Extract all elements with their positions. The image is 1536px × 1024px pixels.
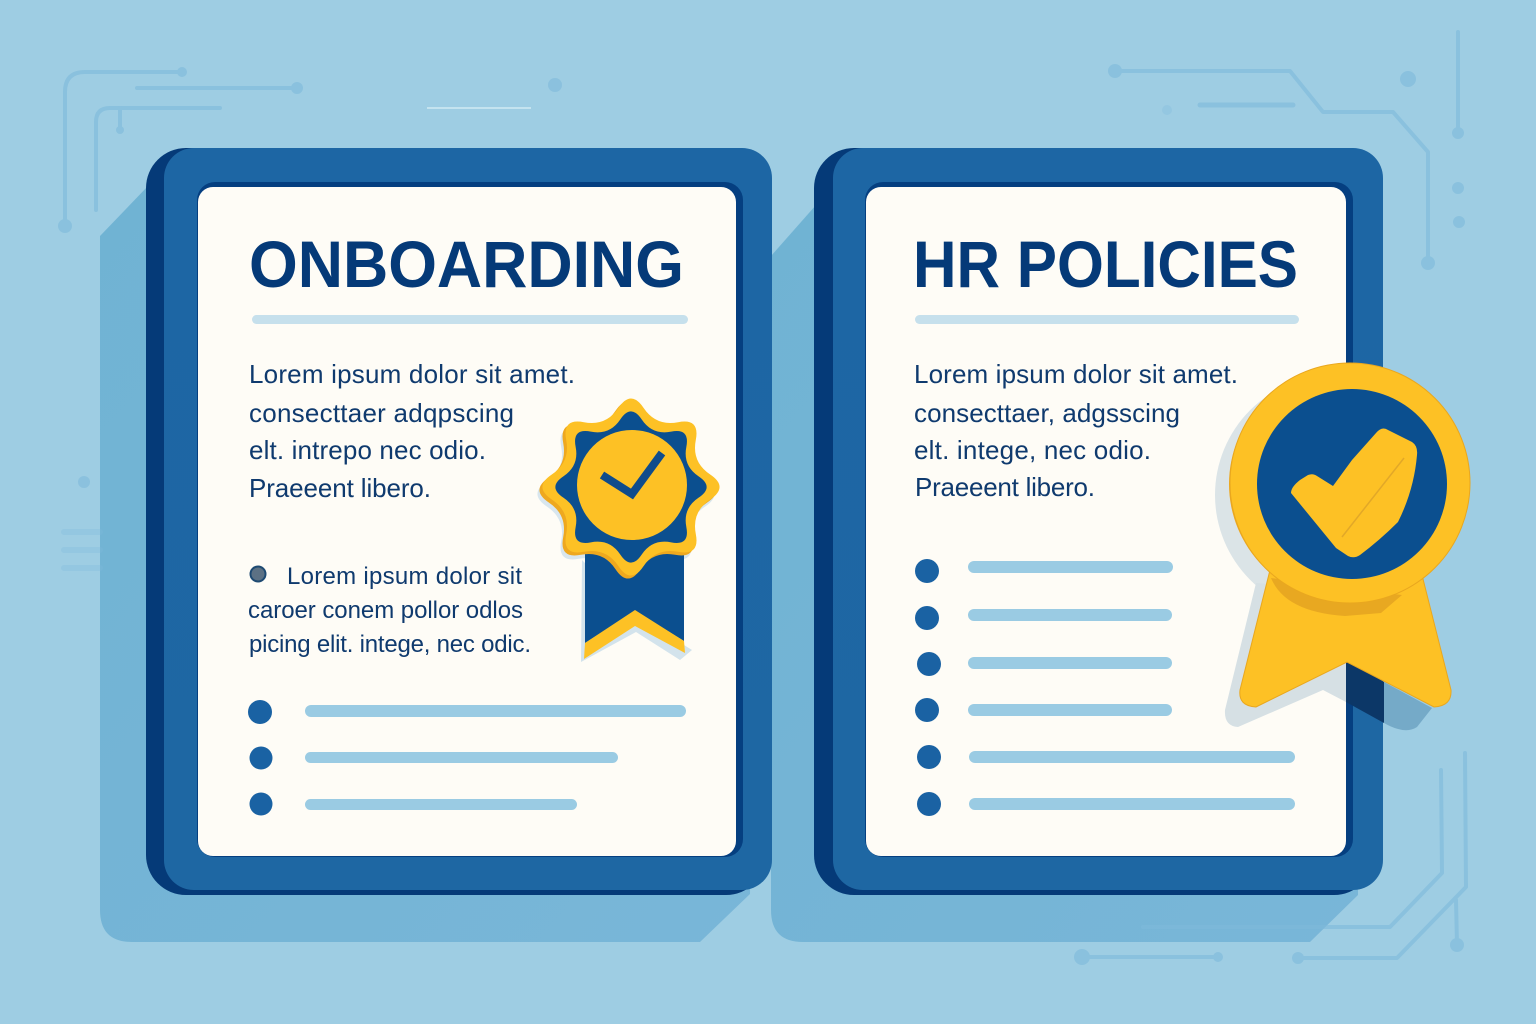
text block: intro paragraph: [249, 359, 575, 503]
rosette side edge: [539, 401, 717, 579]
ribbon shadow: [581, 560, 692, 662]
rosette shadow: [537, 405, 715, 583]
card back edge: [146, 148, 766, 895]
heading underline: [252, 315, 688, 324]
icon: rosette badge with ribbon: [537, 398, 720, 662]
text block: bullet paragraph: [248, 563, 531, 658]
seal circular shadow on paper: [1215, 375, 1455, 615]
icon: large award seal: [1215, 363, 1470, 730]
text block: intro paragraph: consecttaer adqpscing: [249, 398, 514, 428]
faint highlight line: [427, 107, 531, 109]
seal blue disc: [1257, 389, 1447, 579]
rosette blue: [555, 411, 707, 563]
text block: intro paragraph: [914, 359, 1238, 502]
text block: bullet paragraph: caroer conem pollor odlos: [248, 597, 523, 624]
rosette centre disc: [577, 430, 687, 540]
panel: onboarding: [146, 148, 772, 895]
list placeholder rows: [248, 700, 686, 816]
text block: intro paragraph: Lorem ipsum dolor sit amet.: [914, 359, 1238, 389]
seal shadow on card edge: [1346, 660, 1384, 723]
text block: intro paragraph: Praeeent libero.: [249, 473, 431, 503]
text block: intro paragraph: elt. intrepo nec odio.: [249, 435, 486, 465]
paper sheet: [866, 187, 1346, 856]
card front frame: [833, 148, 1383, 890]
text block: intro paragraph: consecttaer, adgsscing: [914, 398, 1180, 428]
ribbon yellow edge: [584, 610, 685, 659]
ribbon shadow on paper: [1225, 583, 1346, 727]
text block: intro paragraph: elt. intege, nec odio.: [914, 435, 1151, 465]
card front frame: [164, 148, 772, 890]
heading: HR policies: HR POLICIES: [913, 227, 1298, 301]
heading underline: [915, 315, 1299, 324]
inner recess: [865, 182, 1353, 857]
rosette outer: [542, 398, 720, 576]
ribbon shade under seal: [1271, 578, 1402, 616]
seal rim: [1230, 363, 1470, 603]
shadow: onboarding card: [100, 186, 760, 942]
check mark: [1291, 429, 1417, 557]
ribbon tails: [1240, 570, 1451, 707]
heading: onboarding: ONBOARDING: [249, 227, 684, 301]
text block: bullet paragraph: picing elit. intege, nec odic.: [249, 631, 531, 658]
seal rim back: [1229, 368, 1461, 600]
bullet dot: [250, 566, 266, 582]
list placeholder rows: [915, 559, 1295, 816]
shadow: HR policies card: [771, 205, 1360, 942]
text block: bullet paragraph: Lorem ipsum dolor sit: [287, 563, 522, 590]
check mark: [602, 453, 662, 494]
text block: intro paragraph: Praeeent libero.: [915, 472, 1095, 502]
check mark crease: [1342, 458, 1404, 537]
card back edge: [814, 148, 1374, 895]
text block: intro paragraph: Lorem ipsum dolor sit amet.: [249, 359, 575, 389]
paper sheet: [198, 187, 736, 856]
panel: HR policies: [814, 148, 1383, 895]
ribbon tail: [585, 552, 684, 643]
inner recess: [197, 182, 743, 857]
seal shadow on background: [1384, 682, 1432, 730]
